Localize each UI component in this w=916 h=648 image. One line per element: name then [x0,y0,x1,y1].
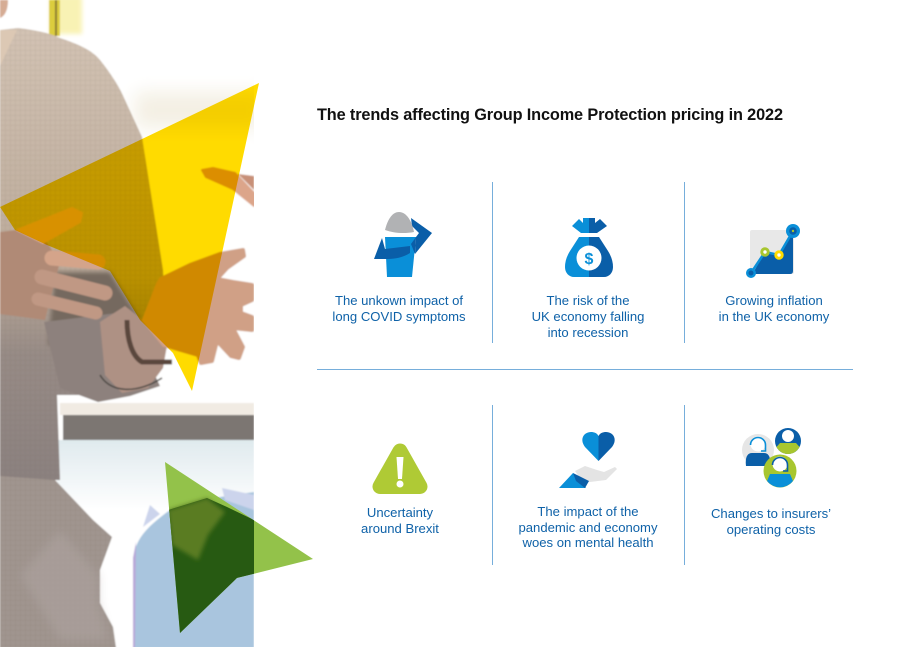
left hand [0,230,60,320]
label: mental health: woes on mental health [521,535,654,550]
title: The trends affecting Group Income Protection pricing in 2022 [317,106,783,124]
item: recession [532,218,644,340]
label: recession: The risk of the [547,293,629,308]
label: Brexit: Uncertainty [367,505,433,520]
icon: warning triangle [380,451,420,488]
dividers [317,182,853,565]
icon: money bag: $ [585,251,594,268]
label: inflation: Growing inflation [725,293,823,308]
label: mental health: The impact of the [537,504,639,519]
icon: heart over hand [559,432,617,488]
sleeve and forearm [44,312,160,402]
label: recession: into recession [548,325,628,340]
shape: yellow triangle overlay [0,83,259,391]
sleeve shadow [48,272,140,350]
sweater torso [0,28,165,480]
icon: rising chart [746,224,800,278]
label: operating costs: operating costs [727,522,816,537]
label: recession: UK economy falling [532,309,644,324]
label: inflation: in the UK economy [719,309,830,324]
icon: three headset agents [742,428,801,488]
jeans [133,492,254,648]
item: Brexit [361,451,439,536]
label: Brexit: around Brexit [361,521,439,536]
item: operating costs [711,428,831,537]
right hand [144,250,252,363]
panel: photo of person gesturing with hands [0,0,265,648]
item: long COVID [332,212,466,324]
label: long COVID: The unkown impact of [335,293,463,308]
label: mental health: pandemic and economy [518,520,658,535]
shape: green triangle overlay [165,462,313,640]
icon: person with hand on head [374,212,432,277]
label: long COVID: long COVID symptoms [332,309,466,324]
item: inflation [719,224,830,324]
item: mental health [518,432,658,550]
lower sweater [0,476,116,648]
label: operating costs: Changes to insurers’ [711,506,831,521]
